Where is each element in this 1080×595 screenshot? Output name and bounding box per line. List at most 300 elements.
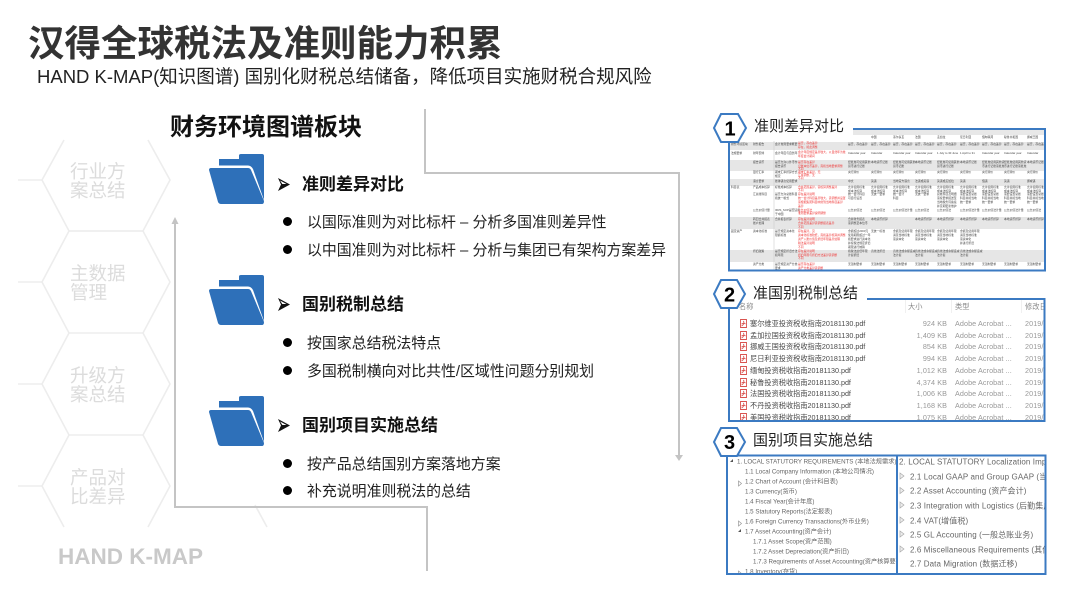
table screenshot: 允许使用标准 <box>1027 185 1044 189</box>
table screenshot: 经批准可使用其他 <box>848 160 871 164</box>
table screenshot: 允许使用标准 <box>915 185 932 189</box>
table screenshot: 统一要求 <box>1027 200 1038 204</box>
table screenshot: 允许使用标准 <box>960 185 977 189</box>
outline screenshot left: 1.7.2 Asset Depreciation(资产折旧) <box>753 548 849 556</box>
table screenshot: 直线法或余额递减 <box>915 249 938 253</box>
table screenshot: Calendar <box>871 151 882 155</box>
table screenshot: 税法差异说明 <box>798 241 815 245</box>
hexagon column: 案总结 <box>70 384 126 405</box>
table screenshot: 是否，存在差异 <box>915 142 935 146</box>
table screenshot: 按税法最低年限 <box>848 249 868 253</box>
table screenshot: Calendar year <box>915 151 933 155</box>
outline screenshot right: 2.2 Asset Accounting (资产会计) <box>910 486 1027 496</box>
table screenshot: 允许使用标准 <box>871 185 888 189</box>
table screenshot: 本地货币折算 <box>982 217 999 221</box>
table screenshot: 需按要求报送至 <box>937 196 957 200</box>
file list screenshot: Adobe Acrobat ... <box>955 413 1012 422</box>
table screenshot: 是否规定资产分类 <box>775 262 798 266</box>
file list screenshot: 924 KB <box>923 319 947 328</box>
table screenshot: 是否规定资本化 <box>775 229 795 233</box>
file list screenshot: 994 KB <box>923 354 947 363</box>
table screenshot: 折旧年限与折旧方法差异需调整 <box>798 253 837 257</box>
table screenshot: 无强制要求 <box>937 262 951 266</box>
table screenshot: 统一会计 <box>893 192 904 196</box>
table screenshot: 央行牌价 <box>915 170 926 174</box>
file list screenshot: 2019/ <box>1025 354 1044 363</box>
table screenshot: 总账科目及明细 <box>937 192 957 196</box>
table screenshot: 报告货币 <box>753 160 764 164</box>
table screenshot: 不同 <box>798 176 804 180</box>
table screenshot: 存在差异说明 <box>798 192 815 196</box>
table screenshot: 差异 <box>798 204 804 208</box>
table screenshot: 科目并按当地 <box>1027 196 1044 200</box>
table screenshot: 公允价值法 <box>798 208 812 212</box>
table screenshot: 成本法核算 <box>915 189 929 193</box>
table screenshot: 直线法或余额递减 <box>937 249 960 253</box>
table screenshot: 财务报告 <box>753 142 764 146</box>
table screenshot: 不同 <box>798 188 804 192</box>
file list screenshot: 2019/ <box>1025 366 1044 375</box>
file list screenshot: 塞尔维亚投资税收指南20181130.pdf <box>750 319 865 328</box>
HAND K-MAP label: HAND K-MAP <box>58 544 203 569</box>
table screenshot: 秘鲁共和国 <box>1004 135 1018 139</box>
table screenshot: 账簿语言使用要求 <box>775 179 798 183</box>
table screenshot: 金额及使用年限 <box>893 229 913 233</box>
table screenshot <box>730 130 1045 270</box>
file list screenshot: Adobe Acrobat ... <box>955 319 1012 328</box>
file list screenshot: Adobe Acrobat ... <box>955 366 1012 375</box>
hexagon column: 行业方 <box>70 161 126 182</box>
table screenshot: 法语或英语 <box>915 179 929 183</box>
table screenshot: 是否，存在差异 <box>893 142 913 146</box>
table screenshot: 无强制要求 <box>871 262 885 266</box>
table screenshot: 经批准可使用其他 <box>937 160 960 164</box>
table screenshot: 是否，存在差异 <box>982 142 1002 146</box>
panel border 3 <box>726 454 1046 575</box>
table screenshot: 科目并按当地 <box>982 196 999 200</box>
table screenshot: 无统一要求 <box>871 192 885 196</box>
bullet text 4: 多国税制横向对比共性/区域性问题分别规划 <box>307 364 594 380</box>
file list screenshot: Adobe Acrobat ... <box>955 354 1012 363</box>
table screenshot: 成本法核算 <box>982 189 996 193</box>
table screenshot: 当地税务局备案 <box>937 200 957 204</box>
table screenshot: 账户处理 <box>753 221 764 225</box>
number badge 3 <box>712 427 746 457</box>
outline screenshot right: 2.4 VAT(增值税) <box>910 516 968 526</box>
table screenshot: 央行牌价 <box>982 170 993 174</box>
table screenshot: 英语 <box>1004 179 1010 183</box>
table screenshot: 允许使用标准 <box>937 185 954 189</box>
table screenshot: 无强制要求 <box>982 262 996 266</box>
table screenshot: 挪威语 <box>1027 179 1036 183</box>
table screenshot: 本地货币记账 <box>915 160 932 164</box>
table screenshot: 公允价值法 <box>937 208 951 212</box>
table screenshot: 规定 <box>775 174 781 178</box>
file list screenshot: 1,012 KB <box>917 366 947 375</box>
table screenshot: 无强制要求 <box>893 262 907 266</box>
table screenshot: 资产分类 <box>753 262 764 266</box>
file list screenshot: 挪威王国投资税收指南20181130.pdf <box>750 342 865 351</box>
table screenshot: 财务环境区块 <box>731 142 748 146</box>
table screenshot: 可自行设置 <box>848 196 862 200</box>
table screenshot: 法国 <box>915 135 921 139</box>
file list screenshot: 1,409 KB <box>917 331 947 340</box>
table screenshot: 统一要求 <box>982 200 993 204</box>
table screenshot: 是否允许总账科目 <box>775 192 798 196</box>
number badge 3: 3 <box>724 432 735 454</box>
table screenshot: 会计准则要求概要 <box>775 142 798 146</box>
table screenshot: 央行牌价 <box>1027 170 1038 174</box>
panel 1: standards difference table <box>712 113 1046 272</box>
table screenshot: 期末汇率差异，无 <box>798 170 821 174</box>
table screenshot: 科目表 <box>731 185 740 189</box>
table screenshot: 本地货币记账 <box>1027 160 1044 164</box>
table screenshot: 是否，存在差异 <box>798 141 818 145</box>
hexagon column: 比差异 <box>70 486 126 507</box>
block 1: standards comparison <box>209 154 666 258</box>
outline screenshot left: 1.5 Statutory Reports(法定报表) <box>745 508 832 516</box>
table screenshot: 是否，存在差异 <box>848 142 868 146</box>
outline screenshot left: 1.2 Chart of Account (会计科目表) <box>745 478 838 486</box>
table screenshot: 公允价值法计量 <box>893 208 913 212</box>
table screenshot: 转回合并报表 <box>753 217 770 221</box>
file list screenshot: 1,075 KB <box>917 413 947 422</box>
table screenshot: Calendar <box>1027 151 1038 155</box>
icon: folder 1 <box>209 154 264 204</box>
table screenshot: 产品成本核算 <box>753 185 770 189</box>
table screenshot: 金额及使用年限 <box>937 229 957 233</box>
file list screenshot: 2019/ <box>1025 413 1044 422</box>
arrow bullet 3 <box>278 419 290 432</box>
table screenshot: 1 April to 31 <box>960 151 975 155</box>
table screenshot: 限额标准 <box>775 233 786 237</box>
panel border 1 <box>728 128 1046 272</box>
table screenshot: 科目并按当地 <box>1004 196 1021 200</box>
table screenshot: 不同 <box>798 256 804 260</box>
number badge 2: 2 <box>724 284 735 306</box>
table screenshot: 成本法核算 <box>848 189 862 193</box>
file list screenshot: Adobe Acrobat ... <box>955 389 1012 398</box>
table screenshot: 直线法或余额递减 <box>960 249 983 253</box>
table screenshot: 满足当地标准 <box>893 233 910 237</box>
heading: country tax summary: 国别税制总结 <box>302 295 404 314</box>
table screenshot: 公允价值法 <box>915 208 929 212</box>
panel title 3: 国别项目实施总结 <box>753 432 873 449</box>
bullet text 5: 按产品总结国别方案落地方案 <box>307 456 501 472</box>
title: 汉得全球税法及准则能力积累 <box>28 23 502 64</box>
number badge 1: 1 <box>724 118 736 140</box>
table screenshot: 满足当地标准 <box>915 233 932 237</box>
table screenshot: 公允价值法 <box>1027 208 1041 212</box>
table screenshot: 法计提 <box>937 253 946 257</box>
table screenshot: 会计年度与自然年 <box>775 151 798 155</box>
heading: standards comparison: 准则差异对比 <box>302 175 404 194</box>
table screenshot: 是否规定折旧方法 <box>775 249 798 253</box>
table screenshot: 统一要求 <box>960 200 971 204</box>
block 3: country implementation summary <box>209 396 501 500</box>
icon: folder 2 <box>209 275 264 325</box>
arrow bullet 1 <box>278 178 290 191</box>
table screenshot: 汇率调整，无 <box>798 173 815 177</box>
table screenshot: 缅语 <box>982 179 988 183</box>
number badge 2 <box>712 279 746 309</box>
table screenshot: 是否存在差异 <box>798 160 815 164</box>
hexagon column: 升级方 <box>70 365 126 386</box>
file list screenshot: 1,006 KB <box>917 389 947 398</box>
table screenshot: 本地货币折算 <box>937 217 954 221</box>
table screenshot: 资产入账价值及折旧年限差异处理 <box>798 237 840 241</box>
table screenshot: 存在差异说明 <box>798 249 815 253</box>
table screenshot: 公允价值计量 <box>753 208 770 212</box>
table screenshot: 存在，按此调整 <box>798 145 818 149</box>
hexagon column: 管理 <box>70 282 107 303</box>
table screenshot: 满足当地标准 <box>960 233 977 237</box>
file list screenshot: 4,374 KB <box>917 378 947 387</box>
table screenshot: 满足当地标准 <box>937 233 954 237</box>
table screenshot: 汇总账科目 <box>753 192 767 196</box>
table screenshot: 货币进行记账 <box>848 164 865 168</box>
table screenshot: 银行汇率 <box>753 170 764 174</box>
table screenshot: 资产分类差异需调整 <box>798 266 823 270</box>
outline screenshot left: 1.7 Asset Accounting(资产会计) <box>745 528 831 536</box>
table screenshot: 计提折旧 <box>848 253 859 257</box>
table screenshot: 缅甸联邦 <box>982 135 993 139</box>
panel 3: country implementation outline <box>712 427 1046 575</box>
table screenshot: 按统一格式 <box>775 196 789 200</box>
table screenshot: 货币进行记账 <box>937 164 954 168</box>
table screenshot: 成本法核算 <box>871 189 885 193</box>
file list screenshot: 法国投资税收指南20181130.pdf <box>750 389 851 398</box>
panel title 2: 准国别税制总结 <box>753 285 858 302</box>
table screenshot: 无强制要求 <box>915 262 929 266</box>
bullet text 3: 按国家总结税法特点 <box>307 336 441 352</box>
outline screenshot right <box>899 458 1046 568</box>
table screenshot: 央行牌价 <box>893 170 904 174</box>
heading: country implementation summary: 国别项目实施总结 <box>302 416 438 435</box>
table screenshot: 和年限 <box>775 253 784 257</box>
table screenshot: 允许使用标准 <box>893 185 910 189</box>
table screenshot: 成本法核算 <box>960 189 974 193</box>
table screenshot: 存在差异说明 <box>798 217 815 221</box>
file list screenshot: 不丹投资税收指南20181130.pdf <box>750 401 851 410</box>
table screenshot: 英语 <box>871 179 877 183</box>
table screenshot: 需资本化 <box>937 237 948 241</box>
icon: folder 3 <box>209 396 264 446</box>
table screenshot: 成本法核算 <box>937 189 951 193</box>
table screenshot: 本地货币折算 <box>871 217 888 221</box>
hexagon column: 案总结 <box>70 180 126 201</box>
table screenshot: 本地货币折算 <box>960 217 977 221</box>
table screenshot: 法计提 <box>893 253 902 257</box>
arrow: top flow into panels <box>424 109 683 461</box>
table screenshot: 中国 <box>871 135 877 139</box>
table screenshot: Calendar year <box>982 151 1000 155</box>
table screenshot: 需要设置总账 <box>1004 192 1021 196</box>
table screenshot: 无统一要求 <box>915 192 929 196</box>
table screenshot: Calendar year <box>848 151 866 155</box>
table screenshot: 语言要求 <box>753 179 764 183</box>
file list screenshot: 类型 <box>955 302 970 311</box>
file list screenshot: Adobe Acrobat ... <box>955 401 1012 410</box>
table screenshot: 并按税法规定折旧 <box>848 241 871 245</box>
table screenshot: 中文 <box>848 179 854 183</box>
block 2: country tax summary <box>209 275 594 380</box>
table screenshot: IFRS_SOP是否适用 <box>775 208 800 212</box>
table screenshot: 公允价值法 <box>871 208 885 212</box>
table screenshot: 公允价值法计量 <box>982 208 1002 212</box>
table screenshot: 央行牌价 <box>960 170 971 174</box>
table screenshot: 无统一标准 <box>871 229 885 233</box>
table screenshot: Calendar year <box>1004 151 1022 155</box>
table screenshot: 是否允许以外币作 <box>775 160 798 164</box>
table screenshot: 是否，存在差异 <box>871 142 891 146</box>
file list screenshot: 2019/ <box>1025 342 1044 351</box>
table screenshot: 需资本化 <box>893 237 904 241</box>
table screenshot: 使用期限超过一年 <box>848 233 871 237</box>
table screenshot: 英语 <box>960 179 966 183</box>
table screenshot: 是否，存在差异 <box>960 142 980 146</box>
outline screenshot left: 1.4 Fiscal Year(会计年度) <box>745 498 814 506</box>
table screenshot: 本地货币折算 <box>1004 217 1021 221</box>
file list screenshot: Adobe Acrobat ... <box>955 378 1012 387</box>
outline screenshot right: 2.5 GL Accounting (一般总账业务) <box>910 530 1033 540</box>
table screenshot: 本地货币记账 <box>871 160 888 164</box>
table screenshot: 公允价值法计量 <box>1004 208 1024 212</box>
table screenshot: 合并报表折算 <box>775 217 792 221</box>
table screenshot: 是否，存在差异 <box>1004 142 1024 146</box>
table screenshot: 需要设置总账 <box>960 192 977 196</box>
table screenshot: 无强制要求 <box>848 262 862 266</box>
table screenshot: 经批准可使用其他 <box>893 160 916 164</box>
table screenshot: 英语或孟加拉 <box>937 179 954 183</box>
table screenshot: 法计提 <box>915 253 924 257</box>
table screenshot: 合并财务报表 <box>848 217 865 221</box>
table screenshot: 存在差异，见 <box>798 229 815 233</box>
table screenshot: 需调整至本位币 <box>848 221 868 225</box>
section heading: 财务环境图谱板块 <box>170 114 362 141</box>
table screenshot: 是否存在差异 <box>798 262 815 266</box>
table screenshot: 合并范围差异需调整报表差异 <box>798 221 835 225</box>
file list screenshot: 尼日利亚投资税收指南20181130.pdf <box>750 354 865 363</box>
table screenshot: 直线法折旧 <box>871 249 885 253</box>
table screenshot: 无强制要求 <box>960 262 974 266</box>
table screenshot: 公允价值法计量 <box>960 208 980 212</box>
subtitle: HAND K-MAP(知识图谱) 国别化财税总结储备，降低项目实施财税合规风险 <box>37 66 652 87</box>
table screenshot: 当地官方语言 <box>893 179 910 183</box>
table screenshot: 公允价值法 <box>848 208 862 212</box>
table screenshot: 统一要求 <box>1004 200 1015 204</box>
file list screenshot: 1,168 KB <box>917 401 947 410</box>
table screenshot: 期末汇率折算方式 <box>775 170 798 174</box>
file list screenshot: 名称 <box>739 302 754 311</box>
table screenshot: 需资本化 <box>960 237 971 241</box>
table screenshot: 允许使用标准 <box>1004 185 1021 189</box>
table screenshot: 经批准使用其他货 <box>1004 160 1027 164</box>
outline screenshot left: 1.3 Currency(货币) <box>745 488 797 496</box>
table screenshot: 折旧政策 <box>753 249 764 253</box>
table screenshot: 要求 <box>775 266 781 270</box>
table screenshot: 资本化标准 <box>753 229 767 233</box>
bullet text 2: 以中国准则为对比标杆 – 分析与集团已有架构方案差异 <box>307 242 666 258</box>
table screenshot: 统一会计科目 <box>848 192 865 196</box>
arrow: bottom flow back to hexagons <box>172 217 428 571</box>
table screenshot: Calendar year <box>893 151 911 155</box>
table screenshot: 准则要求差异说明调整 <box>798 211 826 215</box>
table screenshot: 本地货币记账 <box>960 160 977 164</box>
bullet text 1: 以国际准则为对比标杆 – 分析多国准则差异性 <box>307 214 606 230</box>
file list screenshot: Adobe Acrobat ... <box>955 342 1012 351</box>
file list screenshot: 孟加拉国投资税收指南20181130.pdf <box>750 331 865 340</box>
table screenshot: 不同 <box>798 245 804 249</box>
table screenshot: 标准成本核算 <box>775 185 792 189</box>
table screenshot: 本地货币折算 <box>1027 217 1044 221</box>
table screenshot: 挪威王国 <box>1027 135 1038 139</box>
table screenshot: 尼日利亚 <box>960 135 971 139</box>
table screenshot: 直线法或余额递减 <box>893 249 916 253</box>
hexagon column: 主数据 <box>70 263 126 284</box>
table screenshot: 成本法核算 <box>1004 189 1018 193</box>
table screenshot: 1 July to 30 June <box>937 151 959 155</box>
table screenshot: 法规要求 <box>731 151 742 155</box>
file list screenshot: 2019/ <box>1025 319 1044 328</box>
table screenshot: 统一会计科目差异较大，需调整并设置 <box>798 196 846 200</box>
table screenshot: 币进行记账需批准 <box>1004 164 1027 168</box>
table screenshot: 需资本化 <box>915 237 926 241</box>
table screenshot: 无强制要求 <box>1027 262 1041 266</box>
outline screenshot left: 1. LOCAL STATUTORY REQUIREMENTS (本地法规需求) <box>737 458 896 466</box>
table screenshot: 允许使用标准 <box>982 185 999 189</box>
table screenshot: 年度会计期间 <box>798 154 815 158</box>
table screenshot: 是否，存在差异 <box>937 142 957 146</box>
file list screenshot: 缅甸投资税收指南20181130.pdf <box>750 366 851 375</box>
file list screenshot: 2019/ <box>1025 389 1044 398</box>
table screenshot: 会计年度规定差异较大，以自然年为准 <box>798 150 846 154</box>
file list screenshot: 大小 <box>908 302 923 311</box>
table screenshot: 孟加拉 <box>937 135 946 139</box>
panel 2: country tax files <box>712 279 1046 422</box>
table screenshot: 金额及使用年限 <box>915 229 935 233</box>
table screenshot: 不同 <box>798 167 804 171</box>
table screenshot: 报告货币 <box>775 164 786 168</box>
table screenshot: 需要设置总账 <box>982 192 999 196</box>
file list screenshot: 854 KB <box>923 342 947 351</box>
table screenshot: 允许使用标准 <box>848 185 865 189</box>
table screenshot: 央行牌价 <box>937 170 948 174</box>
outline screenshot left: 1.6 Foreign Currency Transactions(外币业务) <box>745 518 869 526</box>
table screenshot: 需根据集团科目映射到当地科目差异 <box>798 200 843 204</box>
table screenshot: 金额超过2000元 <box>848 229 868 233</box>
arrow bullet 2 <box>278 298 290 311</box>
table screenshot: 固定资产 <box>731 229 742 233</box>
file list screenshot: Adobe Acrobat ... <box>955 331 1012 340</box>
outline screenshot left: 1.1 Local Company Information (本地公司情况) <box>745 468 874 476</box>
table screenshot: 财年安排 <box>753 151 764 155</box>
table screenshot: 央行牌价 <box>1004 170 1015 174</box>
table screenshot: 法计提 <box>960 253 969 257</box>
table screenshot: 成本法核算 <box>1027 189 1041 193</box>
table screenshot: 科目 <box>893 196 899 200</box>
table screenshot: 不同 <box>798 225 804 229</box>
table screenshot: 于中国 <box>775 212 784 216</box>
table screenshot: 记账本位币差异，需按当地要求调整 <box>798 164 843 168</box>
hexagon column: 产品对 <box>70 467 126 488</box>
table screenshot: 本地货币折算 <box>915 217 932 221</box>
table screenshot: 期限进行摊销 <box>848 245 865 249</box>
table screenshot: 货币记账 <box>893 164 904 168</box>
number badge 1 <box>712 113 748 143</box>
table screenshot: 成本法核算 <box>893 189 907 193</box>
outline screenshot left: 1.7.1 Asset Scope(资产范围) <box>753 538 832 546</box>
